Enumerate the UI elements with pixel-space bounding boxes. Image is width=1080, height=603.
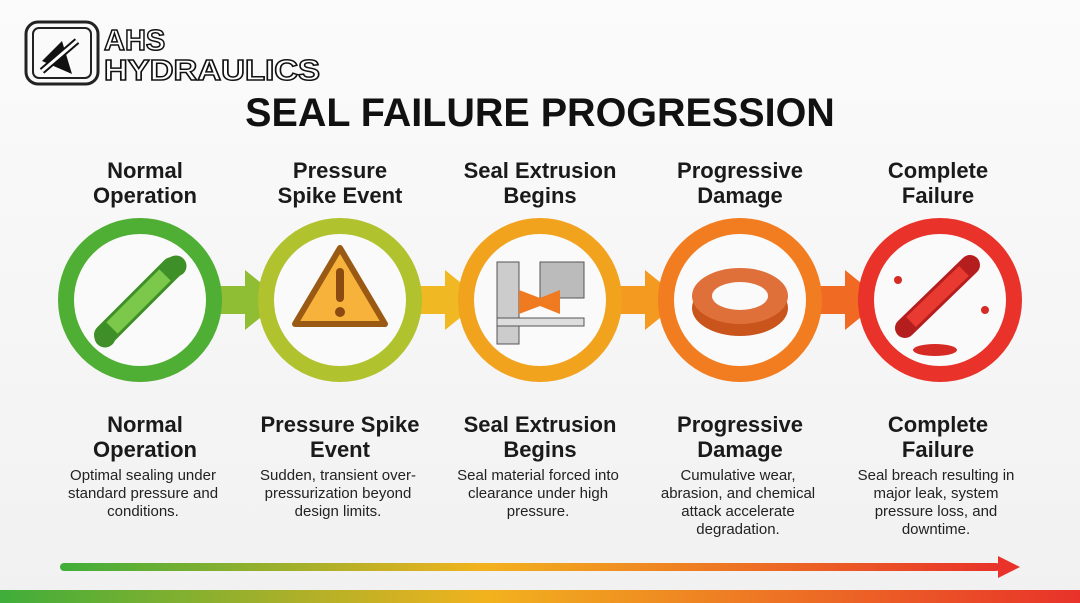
circle 3 <box>466 226 614 374</box>
descriptions: Optimal sealing under standard pressure and conditions. <box>68 467 218 520</box>
circle 2 <box>266 226 414 374</box>
top headings: Begins <box>503 183 577 208</box>
circle 5 <box>866 226 1014 374</box>
top headings: Pressure <box>293 158 387 183</box>
top headings: Seal Extrusion <box>464 158 616 183</box>
lower headings: Pressure Spike <box>260 412 419 437</box>
descriptions: Cumulative wear, abrasion, and chemical attack accelerate degradation. <box>661 467 815 538</box>
lower headings <box>93 412 988 462</box>
title: SEAL FAILURE PROGRESSION <box>245 91 835 135</box>
top headings: Damage <box>697 183 783 208</box>
top headings: Progressive <box>677 158 803 183</box>
lower headings: Progressive <box>677 412 803 437</box>
top headings: Operation <box>93 183 197 208</box>
top headings: Complete <box>888 158 988 183</box>
top headings: Failure <box>902 183 974 208</box>
arrows <box>215 270 882 330</box>
top headings: Spike Event <box>278 183 402 208</box>
lower headings: Begins <box>503 437 577 462</box>
circle 4 <box>666 226 814 374</box>
circle 1 <box>66 226 214 374</box>
top headings: Normal <box>107 158 183 183</box>
lower headings: Complete <box>888 412 988 437</box>
lower headings: Event <box>310 437 370 462</box>
lower headings: Seal Extrusion <box>464 412 616 437</box>
lower headings: Normal <box>107 412 183 437</box>
lower headings: Operation <box>93 437 197 462</box>
circles and arrows <box>58 218 1022 382</box>
descriptions <box>68 467 1014 538</box>
top headings <box>93 158 988 208</box>
descriptions: Seal material forced into clearance under high pressure. <box>457 467 619 520</box>
lower headings: Damage <box>697 437 783 462</box>
descriptions: Seal breach resulting in major leak, system pressure loss, and downtime. <box>858 467 1014 538</box>
logo: AHS <box>104 25 165 57</box>
timeline arrow <box>60 556 1020 578</box>
descriptions: Sudden, transient over-pressurization beyond design limits. <box>260 467 416 520</box>
lower headings: Failure <box>902 437 974 462</box>
bottom bar <box>0 590 1080 603</box>
logo <box>24 20 320 86</box>
